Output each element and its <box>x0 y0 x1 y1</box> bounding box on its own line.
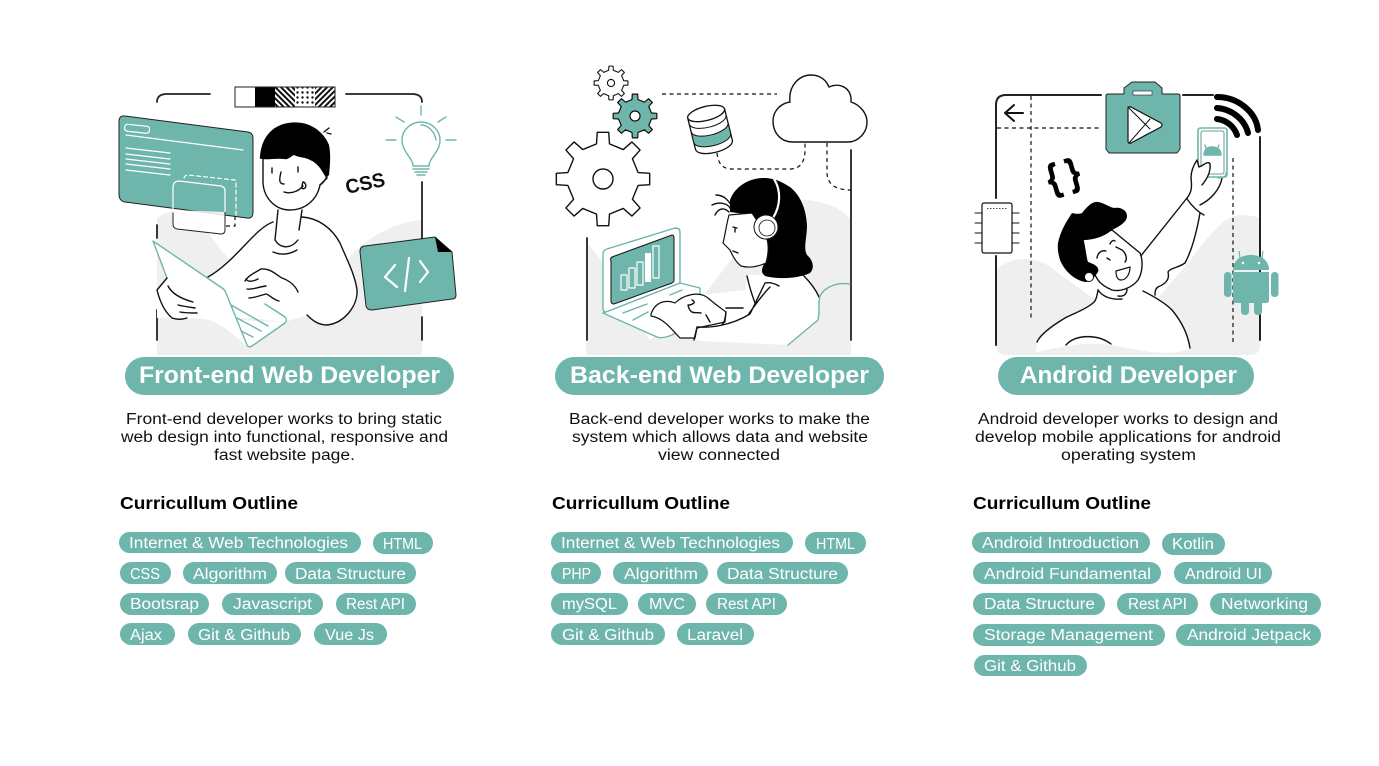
icon: code file <box>360 237 456 310</box>
teal gear hole <box>630 111 640 121</box>
curriculum tags <box>972 532 1321 676</box>
curriculum tags: Data Structure <box>727 566 838 583</box>
person <box>157 122 357 325</box>
curriculum tags: Vue Js <box>325 627 374 644</box>
illustration: android developer <box>975 82 1278 355</box>
browser window <box>119 116 253 234</box>
description: develop mobile applications for android <box>975 429 1281 446</box>
icon: large gear <box>556 132 650 226</box>
panel: front-end web developer <box>119 87 456 645</box>
title pill <box>125 357 454 395</box>
curriculum tags: Algorithm <box>193 566 267 583</box>
label: css: CSS <box>343 169 387 199</box>
description <box>120 411 448 464</box>
curriculum tags: PHP <box>562 566 591 583</box>
panel: back-end web developer <box>551 66 884 645</box>
description: web design into functional, responsive and <box>120 429 448 446</box>
woman <box>655 178 850 345</box>
curriculum tags: Android UI <box>1185 566 1262 583</box>
curriculum tags <box>551 532 866 645</box>
colour pattern bar <box>235 87 335 107</box>
icon: back arrow <box>1005 105 1023 121</box>
title pill: Android Developer <box>1020 362 1237 389</box>
icon: light bulb <box>386 106 456 175</box>
curriculum tags: Android Jetpack <box>1187 627 1311 644</box>
curriculum tags: HTML <box>816 536 855 553</box>
description: Android developer works to design and <box>978 411 1278 428</box>
gear hole <box>593 169 613 189</box>
icon: database <box>686 102 734 157</box>
illustration: front-end developer <box>119 87 456 355</box>
curriculum tags: Data Structure <box>295 566 406 583</box>
curriculum tags: Rest API <box>717 596 776 613</box>
title pill: Back-end Web Developer <box>570 362 869 389</box>
curriculum tags: mySQL <box>562 596 617 613</box>
icon: chip <box>975 203 1019 253</box>
curriculum tags: Git & Github <box>562 627 654 644</box>
description: Back-end developer works to make the <box>569 411 870 428</box>
icon: play store bag <box>1106 82 1180 153</box>
description <box>975 411 1281 464</box>
title pill: Front-end Web Developer <box>139 362 440 389</box>
curriculum tags: MVC <box>649 596 685 613</box>
illustration: back-end developer <box>556 66 867 355</box>
laptop with bar chart <box>603 228 700 338</box>
curriculum tags: Android Fundamental <box>984 566 1151 583</box>
curriculum tags: Storage Management <box>984 627 1154 644</box>
heading: curriculum outline: Curricullum Outline <box>973 493 1151 513</box>
hands on keyboard <box>651 283 779 340</box>
curriculum tags: Kotlin <box>1172 536 1214 553</box>
description: system which allows data and website <box>572 429 868 446</box>
curriculum tags: Javascript <box>233 596 313 613</box>
hands <box>157 269 298 319</box>
title pill <box>555 357 884 395</box>
curriculum tags: Internet & Web Technologies <box>561 535 780 552</box>
icon: curly braces: { } <box>1042 151 1085 201</box>
description <box>569 411 870 464</box>
curriculum tags: Ajax <box>130 627 162 644</box>
curriculum tags: Rest API <box>1128 596 1187 613</box>
icon: cloud <box>773 75 867 142</box>
panel: android developer <box>972 82 1321 676</box>
description: view connected <box>658 447 780 464</box>
curriculum tags: Data Structure <box>984 596 1095 613</box>
curriculum tags: Bootsrap <box>130 596 199 613</box>
curriculum tags: Rest API <box>346 596 405 613</box>
title pill <box>998 357 1254 395</box>
curriculum tags: HTML <box>383 536 422 553</box>
small gear hole <box>607 79 615 87</box>
heading: curriculum outline: Curricullum Outline <box>552 493 730 513</box>
phone in hand <box>1187 128 1227 198</box>
connector lines <box>662 94 851 190</box>
heading: curriculum outline: Curricullum Outline <box>120 493 298 513</box>
curriculum tags: CSS <box>130 566 160 583</box>
icon: wifi <box>1217 97 1258 135</box>
curriculum tags: Git & Github <box>984 658 1076 675</box>
description: fast website page. <box>214 447 355 464</box>
description: Front-end developer works to bring static <box>126 411 442 428</box>
laptop <box>153 241 307 347</box>
man <box>1036 160 1222 353</box>
curriculum tags: Git & Github <box>198 627 290 644</box>
description: operating system <box>1061 447 1196 464</box>
icon: small gear <box>594 66 628 100</box>
curriculum tags: Internet & Web Technologies <box>129 535 348 552</box>
curriculum tags: Android Introduction <box>982 535 1139 552</box>
curriculum tags: Networking <box>1221 596 1308 613</box>
curriculum tags: Laravel <box>687 627 743 644</box>
icon: android robot <box>1224 251 1278 315</box>
curriculum tags: Algorithm <box>624 566 698 583</box>
curriculum tags <box>119 532 433 645</box>
icon: teal gear <box>613 94 657 138</box>
